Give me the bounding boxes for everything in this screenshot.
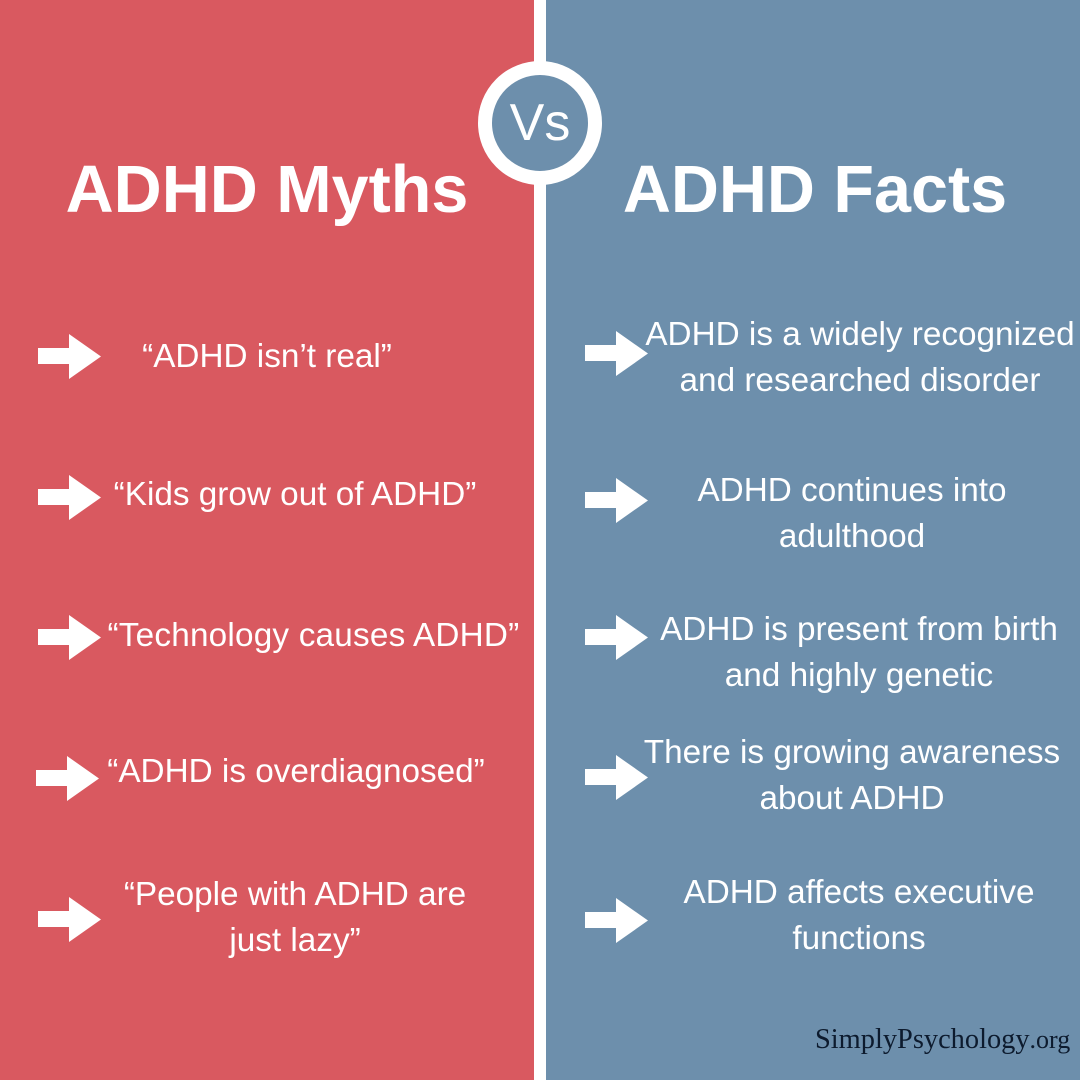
arrow: fact 4 — [585, 755, 648, 800]
fact 5 — [684, 874, 1034, 957]
fact 1: and researched disorder — [680, 362, 1040, 399]
fact 3: ADHD is present from birth — [660, 611, 1058, 648]
myth 1: “ADHD isn’t real” — [142, 338, 392, 375]
arrow: myth 5 — [38, 897, 101, 942]
fact 4: about ADHD — [759, 780, 945, 817]
heading: ADHD Myths: ADHD Myths — [66, 153, 468, 227]
arrow: myth 3 — [38, 615, 101, 660]
fact 2: adulthood — [779, 518, 925, 555]
myth 5: just lazy” — [229, 922, 361, 959]
myth 5: “People with ADHD are — [124, 876, 466, 913]
arrow: fact 3 — [585, 615, 648, 660]
arrow: myth 1 — [38, 334, 101, 379]
arrow: fact 5 — [585, 898, 648, 943]
source credit: SimplyPsychology.org — [815, 1024, 1070, 1055]
heading: ADHD Facts: ADHD Facts — [623, 153, 1007, 227]
fact 2: ADHD continues into — [697, 472, 1007, 509]
fact 1 — [645, 316, 1075, 399]
fact 4 — [644, 734, 1060, 817]
fact 5: functions — [792, 920, 926, 957]
fact 3: and highly genetic — [725, 657, 993, 694]
fact 4: There is growing awareness — [644, 734, 1060, 771]
fact 5: ADHD affects executive — [684, 874, 1034, 911]
myth 3: “Technology causes ADHD” — [108, 617, 519, 654]
fact 1: ADHD is a widely recognized — [645, 316, 1075, 353]
myth 2: “Kids grow out of ADHD” — [114, 476, 476, 513]
arrow: myth 2 — [38, 475, 101, 520]
arrow: myth 4 — [36, 756, 99, 801]
arrow: fact 1 — [585, 331, 648, 376]
fact 2 — [697, 472, 1007, 555]
fact 3 — [660, 611, 1058, 694]
panel: myths — [0, 0, 534, 1080]
badge: Vs — [478, 61, 602, 185]
myth 4: “ADHD is overdiagnosed” — [107, 753, 485, 790]
arrow: fact 2 — [585, 478, 648, 523]
panel: facts — [546, 0, 1080, 1080]
myth 5 — [124, 876, 466, 959]
badge: Vs: Vs — [510, 94, 570, 152]
